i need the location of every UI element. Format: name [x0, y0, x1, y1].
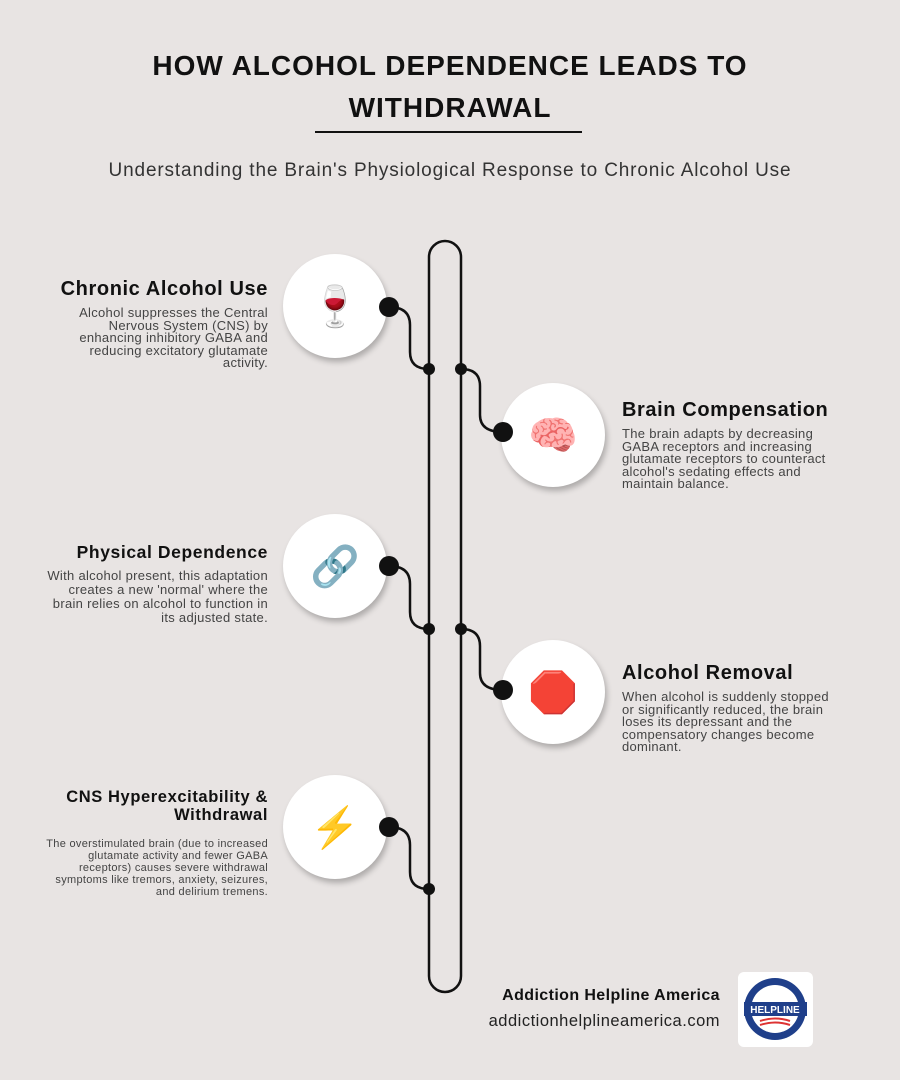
title: HOW ALCOHOL DEPENDENCE LEADS TO [152, 50, 748, 81]
step: Alcohol Removal: Alcohol Removal [622, 662, 793, 684]
icon: stop sign [501, 640, 605, 744]
subtitle: Understanding the Brain's Physiological Response to Chronic Alcohol Use [109, 160, 791, 181]
footer brand text [489, 987, 720, 1030]
icon: brain [501, 383, 605, 487]
icon: lightning: ⚡ [310, 804, 360, 850]
step: CNS Hyperexcitability: The overstimulated brain (due to increased glutamate activity and fewer GABA receptors) causes severe withdrawal symptoms like tremors, anxiety, seizures, and delirium tremens. [46, 838, 268, 898]
icon: wine glass: 🍷 [310, 282, 360, 330]
footer brand text: addictionhelplineamerica.com [489, 1012, 720, 1030]
step: Brain Compensation: Brain Compensation [622, 399, 828, 421]
step: Chronic Alcohol Use: Chronic Alcohol Use [61, 278, 268, 300]
step: Physical Dependence: With alcohol present, this adaptation creates a new 'normal' where the brain relies on alcohol to function in its adjusted state. [47, 568, 268, 625]
step: Alcohol Removal: When alcohol is suddenly stopped or significantly reduced, the brain loses its depressant and the compensatory changes become dominant. [622, 689, 829, 754]
title underline [315, 131, 582, 133]
step: Physical Dependence: Physical Dependence [77, 542, 268, 562]
icon: wine glass [283, 254, 387, 358]
step: Brain Compensation [622, 399, 828, 491]
step: CNS Hyperexcitability [46, 788, 268, 898]
icon: chain link: 🔗 [310, 542, 360, 590]
logo [738, 972, 813, 1047]
step: CNS Hyperexcitability: CNS Hyperexcitability & [66, 788, 268, 806]
footer brand text: Addiction Helpline America [502, 987, 720, 1004]
logo: HELPLINE [750, 1005, 800, 1016]
step: Physical Dependence [47, 542, 268, 625]
icon: chain link [283, 514, 387, 618]
step: CNS Hyperexcitability: Withdrawal [174, 806, 268, 824]
step: Brain Compensation: The brain adapts by decreasing GABA receptors and increasing glutamate receptors to counteract alcohol's sedating effects and maintain balance. [622, 426, 826, 491]
title [152, 50, 748, 123]
icon: brain: 🧠 [528, 412, 578, 458]
icon: lightning [283, 775, 387, 879]
step: Chronic Alcohol Use [61, 278, 268, 370]
step: Chronic Alcohol Use: Alcohol suppresses the Central Nervous System (CNS) by enhancing inhibitory GABA and reducing excitatory glutamate activity. [79, 305, 268, 370]
icon: stop sign: 🛑 [528, 668, 578, 716]
title: WITHDRAWAL [349, 92, 551, 123]
